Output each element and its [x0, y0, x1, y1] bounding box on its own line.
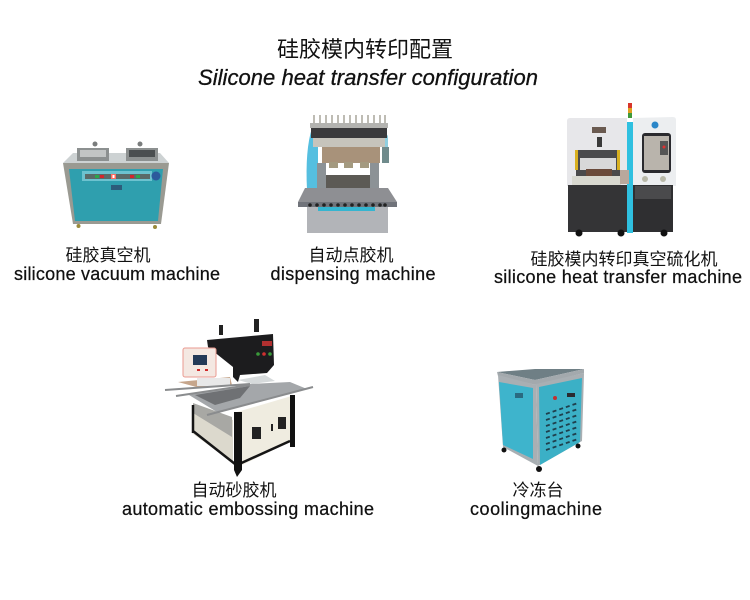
label: Chinese: 硅胶真空机: [66, 246, 150, 265]
label: Chinese: 硅胶模内转印真空硫化机: [530, 250, 718, 269]
label: Chinese: 自动砂胶机: [192, 481, 276, 500]
label: English: silicone heat transfer machine: [494, 267, 742, 287]
icon: embossing machine: [165, 319, 313, 477]
label: English: automatic embossing machine: [122, 499, 374, 519]
panel: silicone vacuum machine: [14, 142, 220, 284]
panel: cooling machine: [470, 369, 602, 519]
label: English: coolingmachine: [470, 499, 602, 519]
label: English: dispensing machine: [270, 264, 436, 284]
title: Chinese: 硅胶模内转印配置: [277, 37, 453, 62]
label: Chinese: 自动点胶机: [308, 246, 394, 265]
panel: dispensing machine: [270, 115, 436, 284]
icon: vacuum machine: [63, 142, 169, 229]
icon: cooling machine: [497, 369, 584, 472]
icon: dispensing machine: [298, 115, 397, 233]
title: English: Silicone heat transfer configuration: [198, 65, 538, 90]
title: [198, 37, 538, 90]
label: English: silicone vacuum machine: [14, 264, 220, 284]
label: Chinese: 冷冻台: [512, 481, 564, 500]
panel: silicone heat transfer machine: [494, 103, 742, 287]
icon: vacuum vulcanizing press: [567, 103, 676, 236]
panel: automatic embossing machine: [122, 319, 374, 519]
